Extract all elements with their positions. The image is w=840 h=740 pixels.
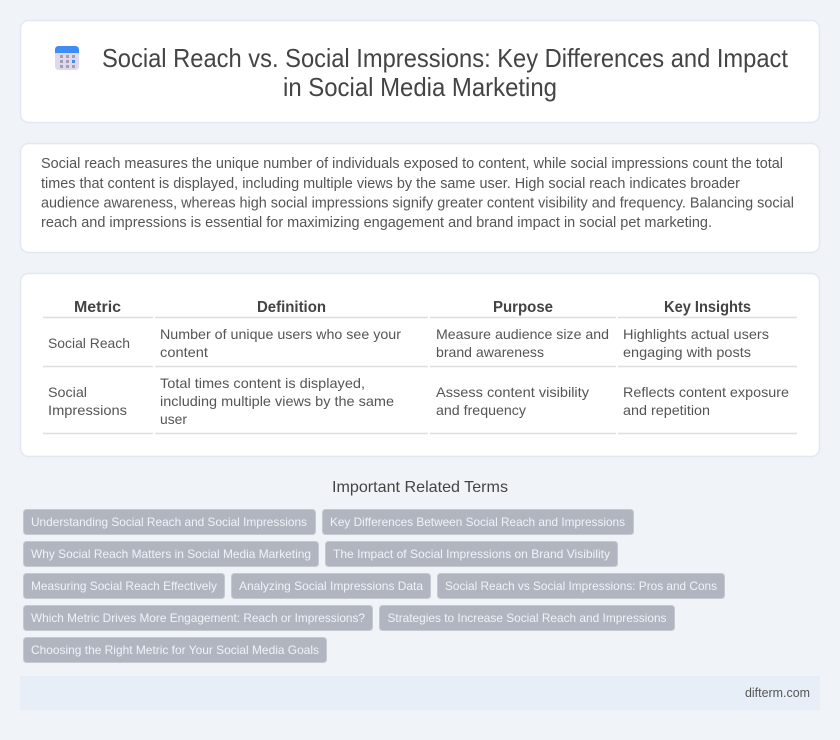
title xyxy=(102,45,788,102)
table row: social impressions: and frequency xyxy=(436,402,526,418)
tag: Strategies to Increase Social Reach and Impressions xyxy=(388,611,666,625)
tag: Social Reach vs Social Impressions: Pros and Cons xyxy=(445,579,717,593)
table row: social impressions: Reflects content exposure xyxy=(623,384,789,400)
table row: social impressions: including multiple views by the same xyxy=(160,393,394,409)
footer bar xyxy=(20,676,820,710)
text block: summary xyxy=(41,156,794,231)
footer text: site name: difterm.com xyxy=(745,685,810,700)
table row: social reach: engaging with posts xyxy=(623,344,751,360)
table row: social reach xyxy=(48,326,769,360)
table row: social impressions: Assess content visibility xyxy=(436,384,589,400)
text block: summary: Social reach measures the unique number of individuals exposed to content, while social impressions count the total xyxy=(41,156,783,172)
table header row xyxy=(74,299,751,316)
table row: social impressions xyxy=(48,375,789,427)
panel: summary paragraph xyxy=(20,144,820,252)
table row: social reach: brand awareness xyxy=(436,344,544,360)
heading: related terms: Important Related Terms xyxy=(332,479,508,496)
panel: comparison table xyxy=(20,274,820,456)
table row: social reach: Measure audience size and xyxy=(436,326,609,342)
tag xyxy=(24,638,326,662)
table row: social reach: Social Reach xyxy=(48,335,130,351)
tag list: related terms xyxy=(24,510,724,662)
table row: social reach: Highlights actual users xyxy=(623,326,769,342)
tag: Choosing the Right Metric for Your Social Media Goals xyxy=(31,643,319,657)
tag xyxy=(322,510,634,534)
icon: calendar xyxy=(55,46,79,70)
table row: social impressions: Total times content is displayed, xyxy=(160,375,365,391)
table row: social impressions: user xyxy=(160,411,187,427)
tag: Understanding Social Reach and Social Impressions xyxy=(31,515,307,529)
tag xyxy=(326,542,618,566)
tag xyxy=(24,574,224,598)
tag: The Impact of Social Impressions on Brand Visibility xyxy=(333,547,610,561)
tag xyxy=(24,606,372,630)
text block: summary: times that content is displayed, including multiple views by the same user. High social reach indicates broader xyxy=(41,176,740,192)
text block: summary: audience awareness, whereas high social impressions signify greater content visibility and frequency. Balancing social xyxy=(41,196,794,212)
table header row: Purpose xyxy=(493,299,553,316)
table row: social reach: Number of unique users who see your xyxy=(160,326,401,342)
tag: Key Differences Between Social Reach and Impressions xyxy=(330,515,625,529)
title: Social Reach vs. Social Impressions: Key Differences and Impact xyxy=(102,45,788,73)
tag xyxy=(380,606,674,630)
tag xyxy=(438,574,724,598)
table row: social impressions: Impressions xyxy=(48,402,127,418)
tag xyxy=(24,542,318,566)
tag: Measuring Social Reach Effectively xyxy=(31,579,217,593)
table row: social reach: content xyxy=(160,344,208,360)
table row: social impressions: Social xyxy=(48,384,87,400)
table header row: Definition xyxy=(257,299,326,316)
table row: social impressions: and repetition xyxy=(623,402,710,418)
tag: Which Metric Drives More Engagement: Reach or Impressions? xyxy=(31,611,365,625)
tag xyxy=(24,510,316,534)
title: in Social Media Marketing xyxy=(283,74,557,102)
tag: Why Social Reach Matters in Social Media Marketing xyxy=(31,547,311,561)
text block: summary: reach and impressions is essential for maximizing engagement and brand impact in social pet marketing. xyxy=(41,215,712,231)
panel: title header xyxy=(20,20,820,122)
table header row: Metric xyxy=(74,299,121,316)
table header row: Key Insights xyxy=(664,299,751,316)
tag: Analyzing Social Impressions Data xyxy=(239,579,423,593)
tag xyxy=(232,574,430,598)
